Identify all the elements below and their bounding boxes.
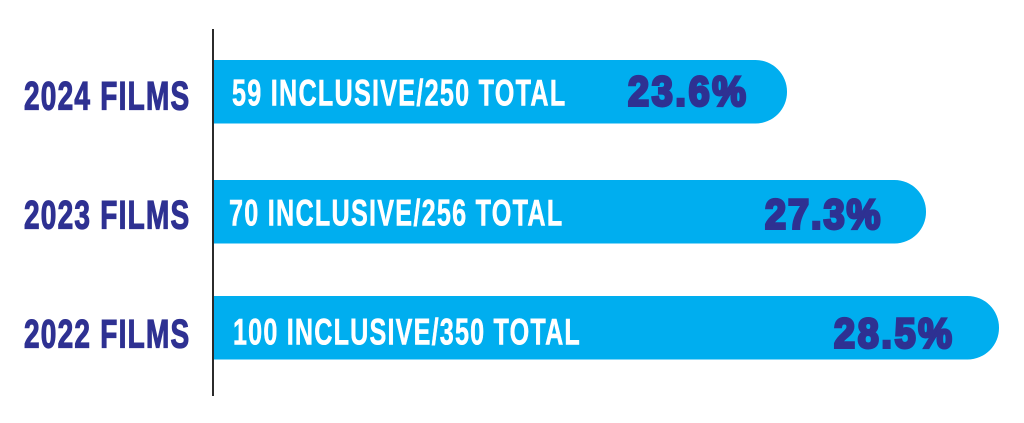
axis line [212,29,214,396]
year label: 2024: 2024 FILMS [24,75,189,119]
bar: 2023 [213,180,926,244]
count label: 2022: 100 INCLUSIVE/350 TOTAL [233,311,580,353]
count label: 2024: 59 INCLUSIVE/250 TOTAL [232,72,565,114]
percentage: 2024: 23.6% [628,69,746,115]
percentage: 2023: 27.3% [765,192,880,238]
year label: 2022: 2022 FILMS [24,313,189,357]
bar: 2022 [213,296,999,360]
percentage: 2022: 28.5% [834,311,952,357]
year label: 2023: 2023 FILMS [24,194,189,238]
row: 2023 films [24,180,926,244]
row: 2022 films [24,296,999,360]
row: 2024 films [24,60,787,124]
bar: 2024 [213,60,787,124]
count label: 2023: 70 INCLUSIVE/256 TOTAL [229,192,562,234]
